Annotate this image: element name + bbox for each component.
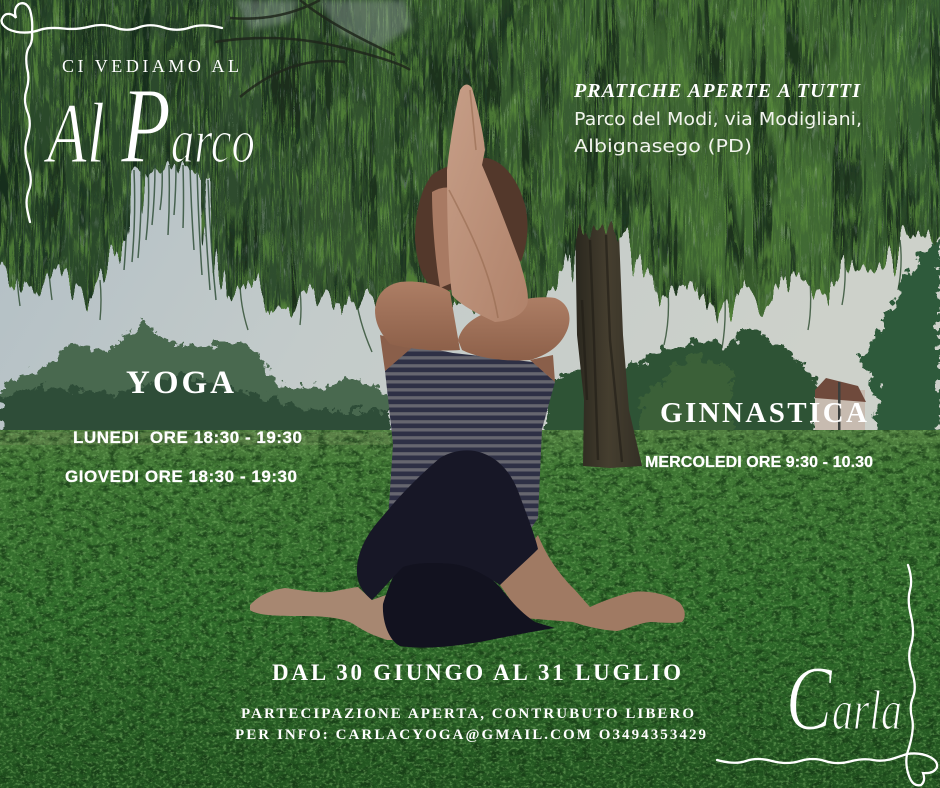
figure: right leg and foot — [500, 535, 685, 631]
text: location: Parco del Modi, via Modigliani, — [574, 110, 862, 130]
background: willow canopy — [0, 0, 940, 340]
figure: raised forearms and hands — [447, 84, 528, 322]
flourish: bottom-right heart and wavy line — [717, 565, 937, 785]
figure: hair — [415, 158, 528, 290]
background: sky gaps and branches in the crown — [215, 0, 412, 97]
text: participation and contact: PER INFO: CARLACYOGA@GMAIL.COM O3494353429 — [235, 727, 706, 743]
background: sky — [0, 0, 940, 460]
text: ginnastica schedule: MERCOLEDI ORE 9:30 - 10.30 — [645, 454, 873, 471]
figure: lower knee — [383, 552, 555, 648]
background: lawn — [0, 430, 940, 788]
text: ginnastica heading: GINNASTICA — [660, 397, 867, 429]
text: dates: DAL 30 GIUNGO AL 31 LUGLIO — [272, 660, 681, 685]
text: location — [574, 110, 862, 157]
text: participation and contact: PARTECIPAZIONE APERTA, CONTRUBUTO LIBERO — [241, 706, 694, 722]
figure: woman in yoga pose — [250, 84, 685, 648]
figure: left shoulder — [375, 282, 460, 351]
background: sparse willow in the sky gap — [124, 165, 216, 300]
figure: chest sides — [380, 335, 555, 382]
figure: forearm shadow — [449, 90, 498, 318]
text: ci vediamo al: CI VEDIAMO AL — [62, 56, 239, 76]
text: yoga schedule: GIOVEDI ORE 18:30 - 19:30 — [65, 467, 297, 486]
figure: right arm — [458, 297, 569, 361]
text: participation and contact — [235, 706, 706, 743]
background: distant house — [815, 378, 866, 432]
figure: upper knee — [357, 450, 538, 600]
text: yoga heading: YOGA — [126, 365, 234, 401]
background: hanging willow strands — [16, 240, 901, 352]
figure: face — [432, 188, 452, 288]
text: script al parco: Al Parco — [43, 67, 255, 186]
figure: left leg and foot — [250, 587, 400, 640]
figure: striped top — [385, 345, 555, 545]
text: yoga schedule: LUNEDI ORE 18:30 - 19:30 — [73, 428, 302, 447]
flourish: top-left heart and wavy line — [2, 3, 222, 222]
text: yoga schedule — [65, 428, 302, 486]
text: location: Albignasego (PD) — [574, 137, 752, 157]
background: far tree line — [0, 235, 940, 440]
text: script signature carla: Carla — [786, 647, 902, 749]
background: tree trunk — [575, 208, 642, 468]
text: open practice heading: PRATICHE APERTE A TUTTI — [573, 80, 861, 102]
